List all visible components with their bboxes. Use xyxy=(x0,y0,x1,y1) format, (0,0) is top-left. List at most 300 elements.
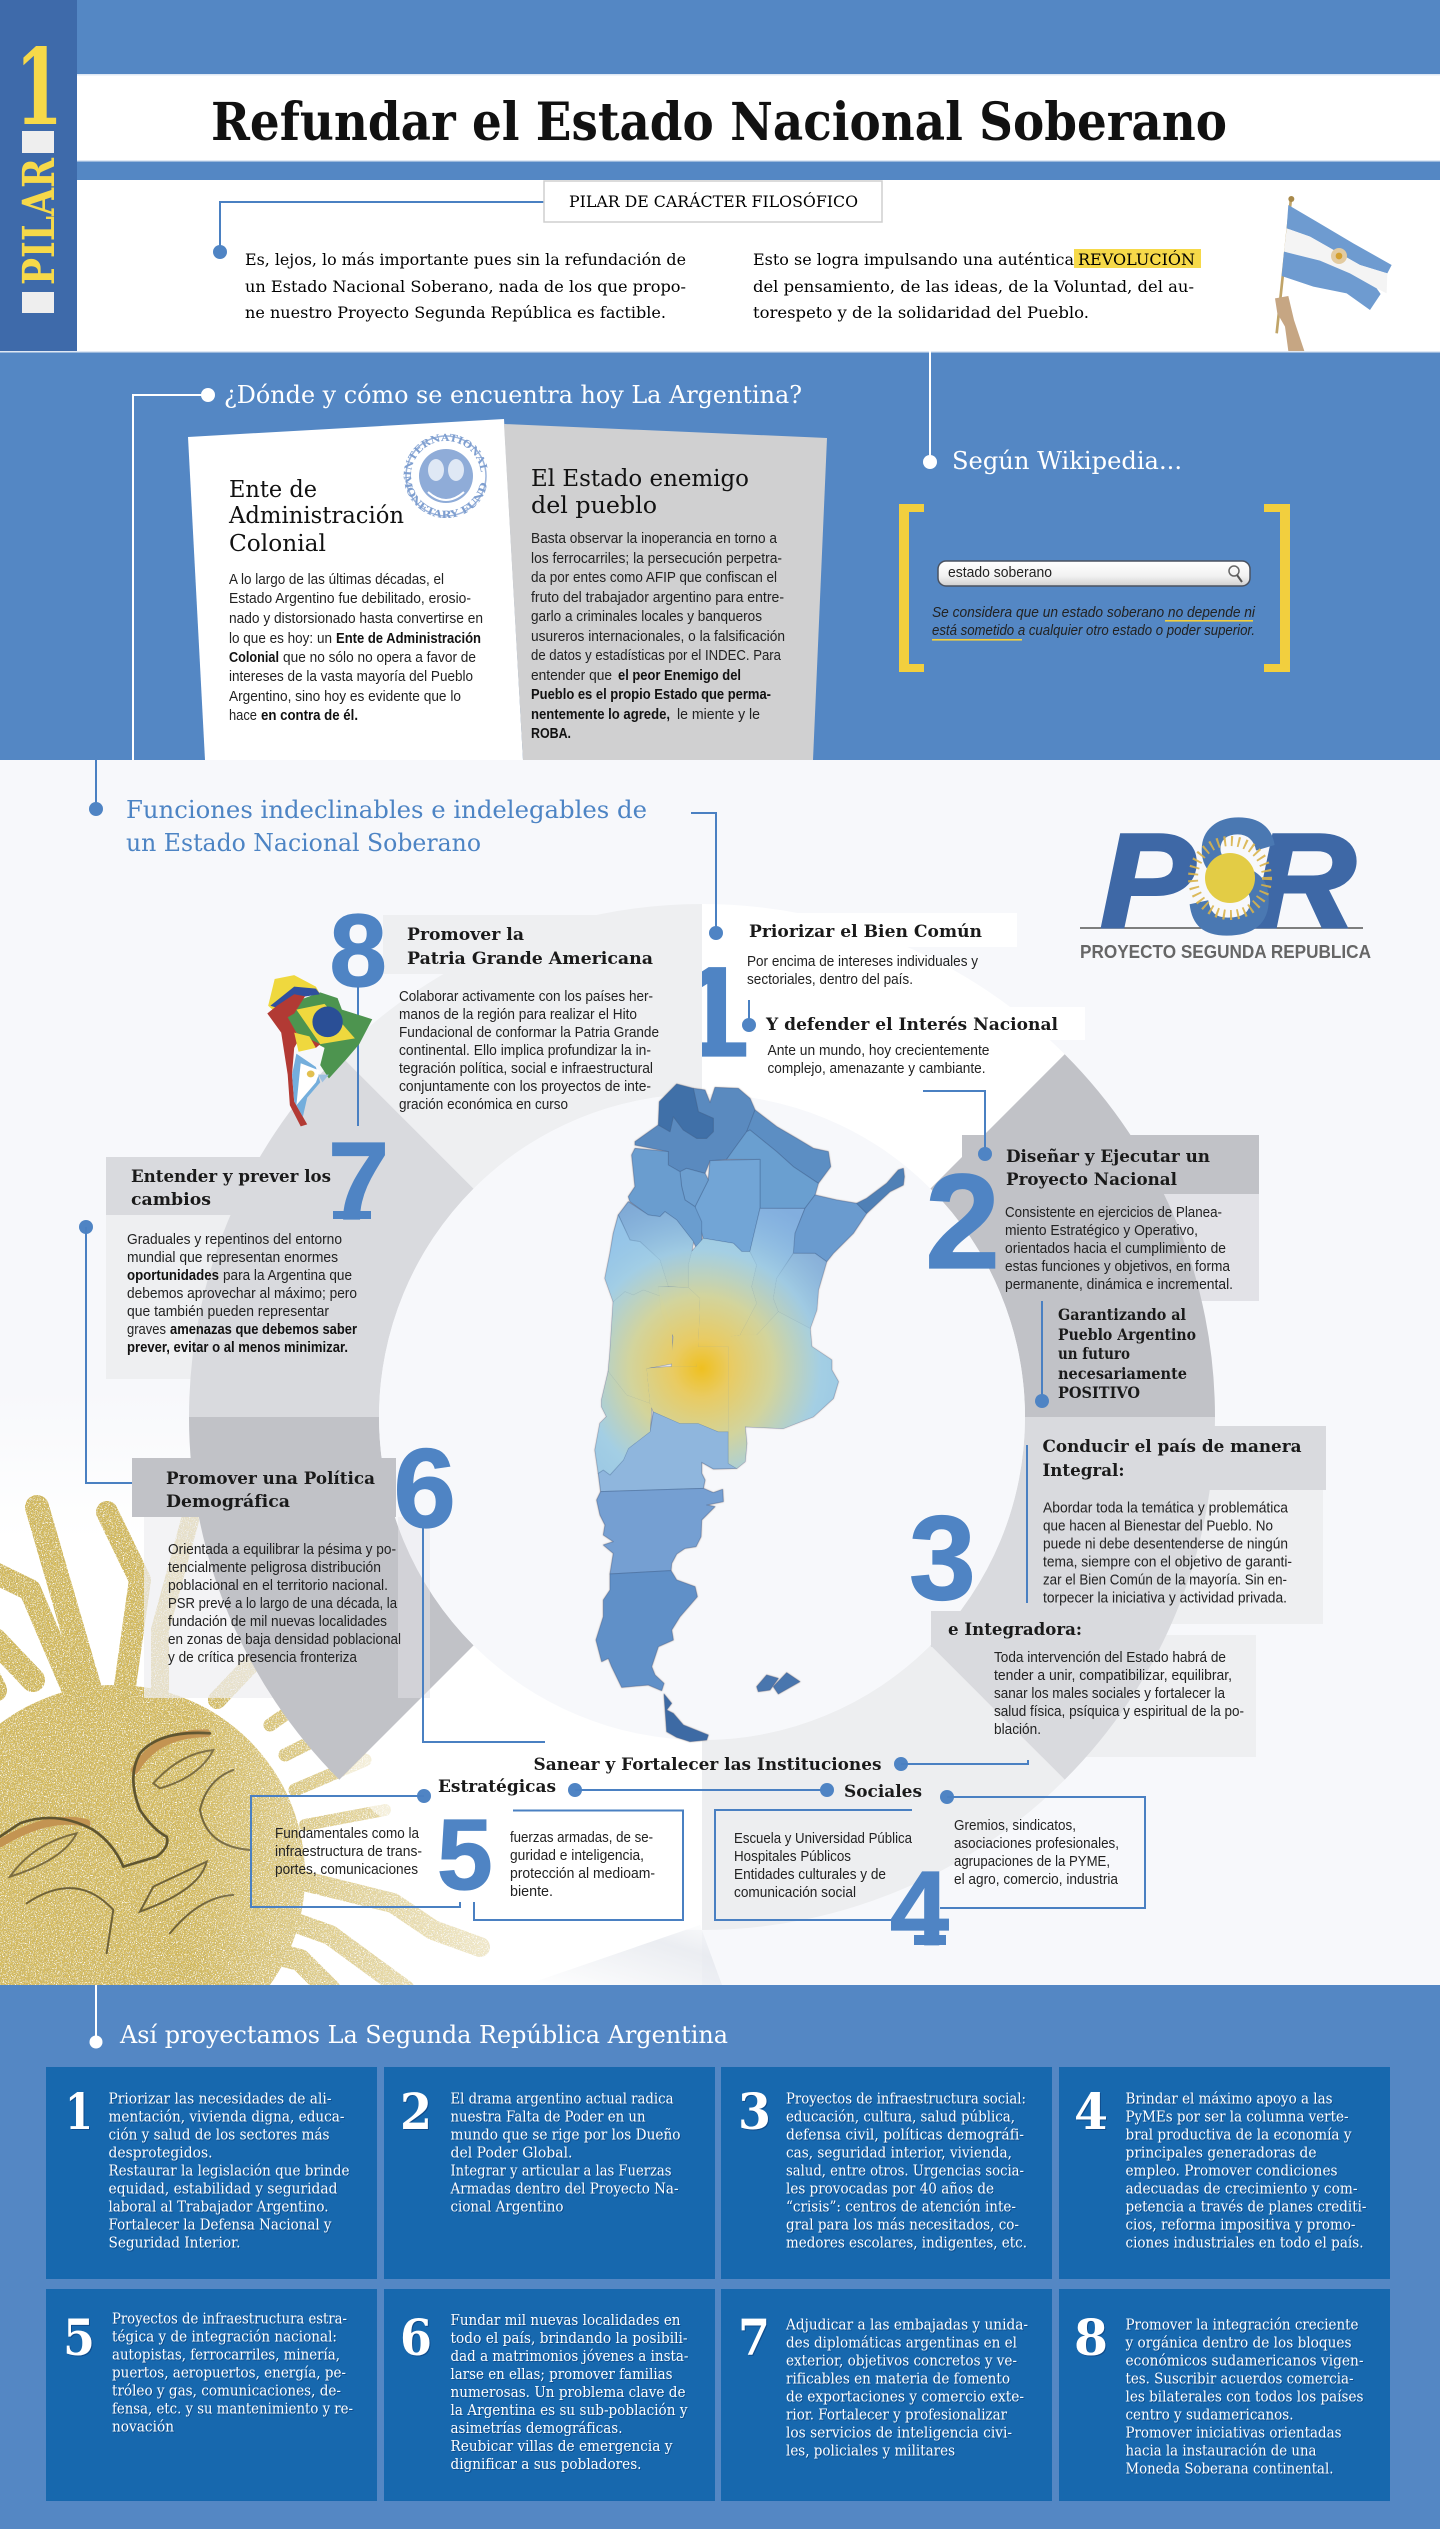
card text 4: Brindar el máximo apoyo a las xyxy=(1126,2089,1332,2107)
section background: segunda republica xyxy=(0,1985,1440,2529)
section background: funciones xyxy=(0,760,1440,1985)
number 6: 6 xyxy=(394,1426,456,1551)
icon: IMF seal xyxy=(404,434,488,518)
heading 7: cambios xyxy=(131,1190,211,1210)
right box connector xyxy=(940,1790,1145,1908)
heading: ente de administracion colonial xyxy=(228,477,404,557)
number 3: 3 xyxy=(909,1491,976,1625)
connector 6 to 5 xyxy=(423,1528,545,1742)
text block integradora: salud física, psíquica y espiritual de la po- xyxy=(994,1704,1244,1720)
text block: ente: A lo largo de las últimas décadas, el xyxy=(229,572,444,588)
card number 7: 7 xyxy=(738,2308,770,2367)
connector estrategicas to sociales xyxy=(568,1783,834,1797)
card text 5: fensa, etc. y su mantenimiento y re- xyxy=(112,2399,353,2417)
callout: garantizando: un futuro xyxy=(1058,1344,1130,1363)
heading 2 xyxy=(1006,1147,1210,1190)
body panel backgrounds xyxy=(106,1194,1323,1757)
text block: estado enemigo xyxy=(531,531,785,742)
text block 5 right xyxy=(510,1830,655,1900)
icon: argentine flag held by hand xyxy=(1275,196,1392,351)
text block 4 left: Escuela y Universidad Pública xyxy=(734,1831,913,1847)
text block: estado enemigo: garlo a criminales locales y banqueros xyxy=(531,609,762,625)
header bands xyxy=(106,913,1326,1647)
text block 6: en zonas de baja densidad poblacional xyxy=(168,1632,401,1648)
card 5 xyxy=(46,2289,377,2501)
item 8: promover la patria grande xyxy=(267,893,659,1126)
card text 2: Armadas dentro del Proyecto Na- xyxy=(450,2179,678,2197)
heading 7: Entender y prever los xyxy=(131,1167,331,1187)
icon: IMF seal: INTERNATIONAL xyxy=(404,434,488,476)
right box connector xyxy=(474,1810,683,1920)
card text 4: bral productiva de la economía y xyxy=(1126,2125,1352,2143)
text block 4 right: el agro, comercio, industria xyxy=(954,1872,1119,1888)
text block 4 right: asociaciones profesionales, xyxy=(954,1836,1119,1852)
text block 4 left: Entidades culturales y de xyxy=(734,1867,886,1883)
heading 3: Conducir el país de manera xyxy=(1042,1437,1302,1457)
text block integradora: tender a unir, compatibilizar, equilibrar, xyxy=(994,1668,1232,1684)
intro text left: ne nuestro Proyecto Segunda República es factible. xyxy=(245,304,666,322)
number 2: 2 xyxy=(925,1146,1000,1297)
text block: estado enemigo: entender que xyxy=(531,668,612,684)
definition text: está sometido a cualquier otro estado o poder superior. xyxy=(932,623,1255,639)
card text 8: económicos sudamericanos vigen- xyxy=(1126,2351,1364,2369)
text block 2: miento Estratégico y Operativo, xyxy=(1005,1223,1198,1239)
intro text right xyxy=(753,249,1201,322)
heading: estado enemigo xyxy=(531,466,749,519)
card text 8: y orgánica dentro de los bloques xyxy=(1125,2333,1352,2351)
text block integradora: blación. xyxy=(994,1722,1041,1738)
item 2: disenar y ejecutar xyxy=(923,1091,1233,1408)
text block 8 xyxy=(399,989,659,1113)
card text 1: Fortalecer la Defensa Nacional y xyxy=(108,2215,332,2233)
text block 1: sectoriales, dentro del país. xyxy=(747,972,913,988)
text block 8: manos de la región para realizar el Hito xyxy=(399,1007,637,1023)
search box xyxy=(938,561,1250,586)
text block 7: para la Argentina que xyxy=(223,1268,352,1284)
text block 2: orientados hacia el cumplimiento de xyxy=(1005,1241,1226,1257)
card text 3: “crisis”: centros de atención inte- xyxy=(786,2197,1016,2215)
heading: ente de administracion colonial: Ente de xyxy=(229,477,317,503)
card text 7: rior. Fortalecer y profesionalizar xyxy=(786,2406,1008,2424)
text block 5 left xyxy=(275,1826,422,1878)
card text 8: Promover la integración creciente xyxy=(1126,2315,1359,2333)
heading: funciones: Funciones indeclinables e indelegables de xyxy=(126,796,647,824)
connector to item 2 xyxy=(923,1091,992,1161)
heading: estado enemigo: del pueblo xyxy=(531,493,657,519)
intro text left xyxy=(245,251,686,322)
card text 1: Restaurar la legislación que brinde xyxy=(108,2161,350,2179)
text block 2: permanente, dinámica e incremental. xyxy=(1005,1277,1233,1293)
logo: PSR: S xyxy=(1188,784,1276,970)
text block 3 xyxy=(1043,1500,1292,1606)
text block 4 left: Hospitales Públicos xyxy=(734,1849,851,1865)
heading 8: Patria Grande Americana xyxy=(407,949,653,969)
card text 8 xyxy=(1125,2315,1364,2477)
text block: estado enemigo: de datos y estadísticas por el INDEC. Para xyxy=(531,648,782,664)
item 1: priorizar el bien comun xyxy=(678,813,1059,1084)
text block 6 xyxy=(168,1542,401,1666)
card text 5: puertos, aeropuertos, energía, pe- xyxy=(112,2363,346,2381)
text block 7 xyxy=(127,1232,357,1356)
card text 5: autopistas, ferrocarriles, minería, xyxy=(112,2345,340,2363)
number 5: 5 xyxy=(437,1799,493,1911)
definition text: Se considera que un estado soberano no depende ni xyxy=(932,605,1256,621)
card text 4: ciones industriales en todo el país. xyxy=(1126,2233,1364,2251)
card text 2: cional Argentino xyxy=(450,2197,564,2215)
text block 8: gración económica en curso xyxy=(399,1097,568,1113)
heading 7 xyxy=(131,1167,331,1210)
card text 3: medores escolares, indigentes, etc. xyxy=(786,2233,1027,2251)
card text 4: cios, reforma impositiva y promo- xyxy=(1126,2215,1356,2233)
panel: estado enemigo del pueblo xyxy=(504,424,827,760)
card number 5: 5 xyxy=(63,2308,95,2367)
text block integradora: Toda intervención del Estado habrá de xyxy=(994,1650,1226,1666)
heading: sanear y fortalecer: Sanear y Fortalecer las Instituciones xyxy=(534,1755,882,1775)
number 8: 8 xyxy=(330,893,387,1008)
definition text xyxy=(932,605,1256,641)
text block 2 xyxy=(1005,1205,1233,1293)
sidebar label PILAR: PILAR xyxy=(14,158,65,285)
text block 6: poblacional en el territorio nacional. xyxy=(168,1578,388,1594)
text block: ente: intereses de la vasta mayoría del Pueblo xyxy=(229,669,473,685)
heading 1: Priorizar el Bien Común xyxy=(749,922,982,942)
text block: estado enemigo: ROBA. xyxy=(531,726,571,742)
callout: garantizando: Pueblo Argentino xyxy=(1058,1325,1196,1344)
card text 8: les bilaterales con todos los países xyxy=(1126,2387,1364,2405)
search box: estado soberano xyxy=(948,565,1052,581)
callout: pilar de caracter filosofico: PILAR DE CARÁCTER FILOSÓFICO xyxy=(569,193,858,211)
heading: estado enemigo: El Estado enemigo xyxy=(531,466,749,492)
card text 6: numerosas. Un problema clave de xyxy=(450,2383,686,2401)
text block 6: y de crítica presencia fronteriza xyxy=(168,1650,358,1666)
text block 2: Consistente en ejercicios de Planea- xyxy=(1005,1205,1222,1221)
heading: segun wikipedia: Según Wikipedia... xyxy=(952,447,1182,475)
intro text left: un Estado Nacional Soberano, nada de los que propo- xyxy=(245,278,686,296)
card text 1: equidad, estabilidad y seguridad xyxy=(108,2179,338,2197)
text block: estado enemigo: nentemente lo agrede, xyxy=(531,707,670,723)
card text 6: Fundar mil nuevas localidades en xyxy=(450,2311,681,2329)
card number 6: 6 xyxy=(400,2308,432,2367)
heading sociales: Sociales xyxy=(844,1782,922,1802)
text block 4 left xyxy=(734,1831,913,1901)
card text 1: Seguridad Interior. xyxy=(108,2233,240,2251)
card text 2: Integrar y articular a las Fuerzas xyxy=(450,2161,672,2179)
heading 2: Diseñar y Ejecutar un xyxy=(1006,1147,1210,1167)
text block integradora: sanar los males sociales y fortalecer la xyxy=(994,1686,1226,1702)
card 2 xyxy=(384,2067,715,2279)
left box connector xyxy=(715,1810,912,1920)
card text 1: ción y salud de los sectores más xyxy=(108,2125,330,2143)
text block 8: Fundacional de conformar la Patria Grande xyxy=(399,1025,659,1041)
text block 5 left: infraestructura de trans- xyxy=(275,1844,422,1860)
text block 5 right: biente. xyxy=(510,1884,553,1900)
text block 7: oportunidades xyxy=(127,1268,219,1284)
card text 4: PyMEs por ser la columna verte- xyxy=(1126,2107,1348,2125)
card text 7: des diplomáticas argentinas en el xyxy=(786,2334,1017,2352)
card number 3: 3 xyxy=(738,2082,771,2141)
heading: ente de administracion colonial: Administración xyxy=(228,503,404,529)
card text 5: Proyectos de infraestructura estra- xyxy=(112,2309,347,2327)
text block 2: estas funciones y objetivos, en forma xyxy=(1005,1259,1231,1275)
text block: ente: que no sólo no opera a favor de xyxy=(283,650,476,666)
card text 1: laboral al Trabajador Argentino. xyxy=(108,2197,328,2215)
text block: ente: Colonial xyxy=(229,650,279,666)
card text 6: larse en ellas; promover familias xyxy=(450,2365,672,2383)
card text 2: El drama argentino actual radica xyxy=(450,2089,674,2107)
text block 7: prever, evitar o al menos minimizar. xyxy=(127,1340,348,1356)
text block 5 right: protección al medioam- xyxy=(510,1866,655,1882)
card text 7: les, policiales y militares xyxy=(786,2442,955,2460)
card text 8: centro y sudamericanos. xyxy=(1126,2405,1294,2423)
card text 3: salud, entre otros. Urgencias socia- xyxy=(786,2161,1024,2179)
number 4: 4 xyxy=(890,1850,949,1968)
number 7: 7 xyxy=(328,1120,389,1243)
card text 6: todo el país, brindando la posibili- xyxy=(450,2329,688,2347)
text block 6: fundación de mil nuevas localidades xyxy=(168,1614,387,1630)
card 4 xyxy=(1059,2067,1390,2279)
text block: estado enemigo: da por entes como AFIP que confiscan el xyxy=(531,570,777,586)
text block 7: debemos aprovechar al máximo; pero xyxy=(127,1286,357,1302)
card 1 xyxy=(46,2067,377,2279)
heading interes nacional: Y defender el Interés Nacional xyxy=(765,1015,1059,1035)
callout: pilar de caracter filosofico xyxy=(213,181,882,259)
item 7: entender y prever xyxy=(79,1120,389,1483)
connector to item 1 xyxy=(691,813,723,940)
text block 7: amenazas que debemos saber xyxy=(170,1322,357,1338)
heading: funciones xyxy=(89,760,647,857)
text block 5 right: guridad e inteligencia, xyxy=(510,1848,644,1864)
card number 4: 4 xyxy=(1074,2082,1108,2141)
text block 7: mundial que representan enormes xyxy=(127,1250,338,1266)
card text 8: hacia la instauración de una xyxy=(1126,2441,1317,2459)
intro text right: REVOLUCIÓN xyxy=(1078,251,1195,269)
number 1: 1 xyxy=(678,941,749,1084)
text block: ente xyxy=(229,572,483,724)
item 6: politica demografica xyxy=(166,1426,545,1742)
title: Refundar el Estado Nacional Soberano xyxy=(211,92,1227,153)
logo: PSR: R xyxy=(1252,807,1356,956)
logo: PSR xyxy=(1080,784,1371,970)
logo: PSR: P xyxy=(1100,807,1196,956)
card text 3: gral para los más necesitados, co- xyxy=(786,2215,1019,2233)
panel: ente de administracion colonial xyxy=(188,419,523,760)
card text 1 xyxy=(108,2089,350,2251)
text block 1 xyxy=(747,954,979,988)
text block 7: que también pueden representar xyxy=(127,1304,329,1320)
card text 3: defensa civil, políticas demográfi- xyxy=(786,2125,1024,2143)
card 3 xyxy=(721,2067,1052,2279)
text block 4 right: agrupaciones de la PYME, xyxy=(954,1854,1110,1870)
card number 2: 2 xyxy=(400,2082,432,2141)
text block interes nacional xyxy=(768,1043,990,1077)
card text 6: dignificar a sus pobladores. xyxy=(450,2455,642,2473)
callout: garantizando xyxy=(1035,1301,1196,1408)
card text 7: de exportaciones y comercio exte- xyxy=(786,2388,1024,2406)
text block 3: tema, siempre con el objetivo de garanti- xyxy=(1043,1554,1292,1570)
text block: ente: Argentino, sino hoy es evidente que lo xyxy=(229,689,461,705)
text block 6: PSR prevé a lo largo de una década, la xyxy=(168,1596,398,1612)
text block 4 right: Gremios, sindicatos, xyxy=(954,1818,1076,1834)
decorative sun of May xyxy=(0,1495,490,1985)
card text 5: tróleo y gas, comunicaciones, de- xyxy=(112,2381,341,2399)
heading 8: Promover la xyxy=(407,925,524,945)
panel body overlap in inner disk xyxy=(398,1517,430,1698)
text block: estado enemigo: fruto del trabajador argentino para entre- xyxy=(531,590,784,606)
text block: ente: Estado Argentino fue debilitado, erosio- xyxy=(229,591,471,607)
text block 6: tencialmente peligrosa distribución xyxy=(168,1560,381,1576)
card text 7 xyxy=(785,2316,1028,2460)
card text 7: Adjudicar a las embajadas y unida- xyxy=(785,2316,1028,2334)
text block integradora xyxy=(994,1650,1244,1738)
card text 6: dad a matrimonios jóvenes a insta- xyxy=(450,2347,688,2365)
heading: asi proyectamos: Así proyectamos La Segunda República Argentina xyxy=(119,2021,728,2049)
card text 4: empleo. Promover condiciones xyxy=(1126,2161,1338,2179)
text block interes nacional: Ante un mundo, hoy crecientemente xyxy=(768,1043,990,1059)
text block 7: Graduales y repentinos del entorno xyxy=(127,1232,342,1248)
text block 3: torpecer la iniciativa y actividad privada. xyxy=(1043,1590,1287,1606)
text block 5 left: Fundamentales como la xyxy=(275,1826,420,1842)
card text 8: tes. Suscribir acuerdos comercia- xyxy=(1126,2369,1354,2387)
text block 8: Colaborar activamente con los países her- xyxy=(399,989,653,1005)
text block 6: Orientada a equilibrar la pésima y po- xyxy=(168,1542,396,1558)
card text 2 xyxy=(450,2089,680,2215)
card text 8: Promover iniciativas orientadas xyxy=(1126,2423,1342,2441)
card text 8: Moneda Soberana continental. xyxy=(1126,2459,1334,2477)
title white band xyxy=(77,74,1440,162)
text block 5 right: fuerzas armadas, de se- xyxy=(510,1830,653,1846)
intro text right: Esto se logra impulsando una auténtica xyxy=(753,251,1074,269)
intro text right: del pensamiento, de las ideas, de la Voluntad, del au- xyxy=(753,278,1194,296)
text block 1: Por encima de intereses individuales y xyxy=(747,954,979,970)
card text 7: rificables en materia de fomento xyxy=(786,2370,1010,2388)
heading: donde y como: ¿Dónde y cómo se encuentra hoy La Argentina? xyxy=(224,381,802,409)
text block: estado enemigo: Pueblo es el propio Estado que perma- xyxy=(531,687,771,703)
heading 8 xyxy=(407,925,653,969)
left box connector xyxy=(251,1789,460,1907)
item 4: sociales xyxy=(715,1782,1145,1968)
text block 3: que hacen al Bienestar del Pueblo. No xyxy=(1043,1518,1273,1534)
sidebar numeral 1: 1 xyxy=(15,25,63,149)
card text 2: mundo que se rige por los Dueño xyxy=(450,2125,680,2143)
panel: wikipedia definition xyxy=(899,504,1290,672)
card 6 xyxy=(384,2289,715,2501)
card number 8: 8 xyxy=(1074,2308,1108,2367)
connector to Argentina heading xyxy=(133,388,215,760)
text block 7: graves xyxy=(127,1322,166,1338)
text block interes nacional: complejo, amenazante y cambiante. xyxy=(768,1061,986,1077)
card text 5: tégica y de integración nacional: xyxy=(112,2327,337,2345)
text block 5 left: portes, comunicaciones xyxy=(275,1862,418,1878)
card text 1: Priorizar las necesidades de ali- xyxy=(108,2089,332,2107)
heading 3: Integral: xyxy=(1042,1461,1124,1481)
text block: estado enemigo: los ferrocarriles; la persecución perpetra- xyxy=(531,551,782,567)
heading 3 xyxy=(1042,1437,1302,1481)
item 3: conducir el pais xyxy=(909,1437,1302,1738)
number 1 xyxy=(702,967,746,1057)
heading 2: Proyecto Nacional xyxy=(1006,1170,1178,1190)
yellow brackets xyxy=(899,504,1290,672)
text block: ente: Ente de Administración xyxy=(336,631,481,647)
text block 3: zar el Bien Común de la mayoría. Sin en- xyxy=(1043,1572,1287,1588)
callout: garantizando: POSITIVO xyxy=(1058,1383,1140,1402)
text block 8: continental. Ello implica profundizar la in- xyxy=(399,1043,651,1059)
card 8 xyxy=(1059,2289,1390,2501)
top blue background band xyxy=(0,0,1440,760)
text block: ente: nado y distorsionado hasta convertirse en xyxy=(229,611,483,627)
sidebar: pilar 1 xyxy=(0,0,77,351)
card text 6: asimetrías demográficas. xyxy=(450,2419,622,2437)
connector to Wikipedia heading xyxy=(923,351,937,469)
card text 6: la Argentina es su sub-población y xyxy=(450,2401,688,2419)
card 7 xyxy=(721,2289,1052,2501)
card text 4: adecuadas de crecimiento y com- xyxy=(1126,2179,1358,2197)
logo: PSR: PROYECTO SEGUNDA REPUBLICA xyxy=(1080,942,1371,962)
text block: estado enemigo: usureros internacionales, o la falsificación xyxy=(531,629,785,645)
text block: estado enemigo: Basta observar la inoperancia en torno a xyxy=(531,531,778,547)
card text 2: nuestra Falta de Poder en un xyxy=(450,2107,646,2125)
card text 3: les provocadas por 40 años de xyxy=(786,2179,994,2197)
map of Argentina xyxy=(595,1084,904,1742)
callout: garantizando: necesariamente xyxy=(1058,1364,1187,1383)
card text 1: desprotegidos. xyxy=(108,2143,212,2161)
intro text left: Es, lejos, lo más importante pues sin la refundación de xyxy=(245,251,686,269)
item 5: estrategicas xyxy=(251,1777,683,1920)
text block 3: Abordar toda la temática y problemática xyxy=(1043,1500,1289,1516)
connector 7 to 6 xyxy=(79,1220,132,1483)
text block 4 right xyxy=(954,1818,1119,1888)
card text 3: educación, cultura, salud pública, xyxy=(786,2107,1015,2125)
intro white band xyxy=(0,180,1440,352)
text block: ente: lo que es hoy: un xyxy=(229,631,332,647)
heading: asi proyectamos xyxy=(90,1985,728,2049)
callout: garantizando: Garantizando al xyxy=(1058,1305,1186,1324)
card text 3: cas, seguridad interior, vivienda, xyxy=(786,2143,1012,2161)
card text 6 xyxy=(450,2311,688,2473)
icon: south america flags map xyxy=(267,975,372,1126)
text block 8: tegración política, social e infraestructural xyxy=(399,1061,653,1077)
text block: estado enemigo: le miente y le xyxy=(677,707,760,723)
card text 7: los servicios de inteligencia civi- xyxy=(786,2424,1012,2442)
heading 6: Demográfica xyxy=(166,1492,290,1512)
card text 7: exterior, objetivos concretos y ve- xyxy=(786,2352,1017,2370)
text block 8: conjuntamente con los proyectos de inte- xyxy=(399,1079,651,1095)
heading 6 xyxy=(166,1469,375,1512)
circular diagram ring xyxy=(189,904,1215,1930)
card text 5: novación xyxy=(112,2417,174,2435)
card text 4: principales generadoras de xyxy=(1126,2143,1317,2161)
text block 4 left: comunicación social xyxy=(734,1885,856,1901)
heading estrategicas: Estratégicas xyxy=(438,1777,556,1797)
text block 3: puede ni debe desentenderse de ningún xyxy=(1043,1536,1288,1552)
card text 4 xyxy=(1126,2089,1366,2251)
card text 3: Proyectos de infraestructura social: xyxy=(786,2089,1026,2107)
card text 3 xyxy=(786,2089,1027,2251)
heading: funciones: un Estado Nacional Soberano xyxy=(126,829,481,857)
card text 1: mentación, vivienda digna, educa- xyxy=(108,2107,344,2125)
connector interes nacional xyxy=(742,1000,756,1032)
text block: ente: hace xyxy=(229,708,257,724)
heading integradora: e Integradora: xyxy=(948,1620,1082,1640)
icon: IMF seal: MONETARY FUND xyxy=(404,476,486,518)
intro text right: torespeto y de la solidaridad del Pueblo. xyxy=(753,304,1089,322)
card text 4: petencia a través de planes crediti- xyxy=(1126,2197,1366,2215)
card text 2: del Poder Global. xyxy=(450,2143,572,2161)
text block: ente: en contra de él. xyxy=(261,708,358,724)
card number 1: 1 xyxy=(65,2082,93,2141)
heading: ente de administracion colonial: Colonial xyxy=(229,531,326,557)
text block: estado enemigo: el peor Enemigo del xyxy=(618,668,741,684)
heading 6: Promover una Política xyxy=(166,1469,375,1489)
